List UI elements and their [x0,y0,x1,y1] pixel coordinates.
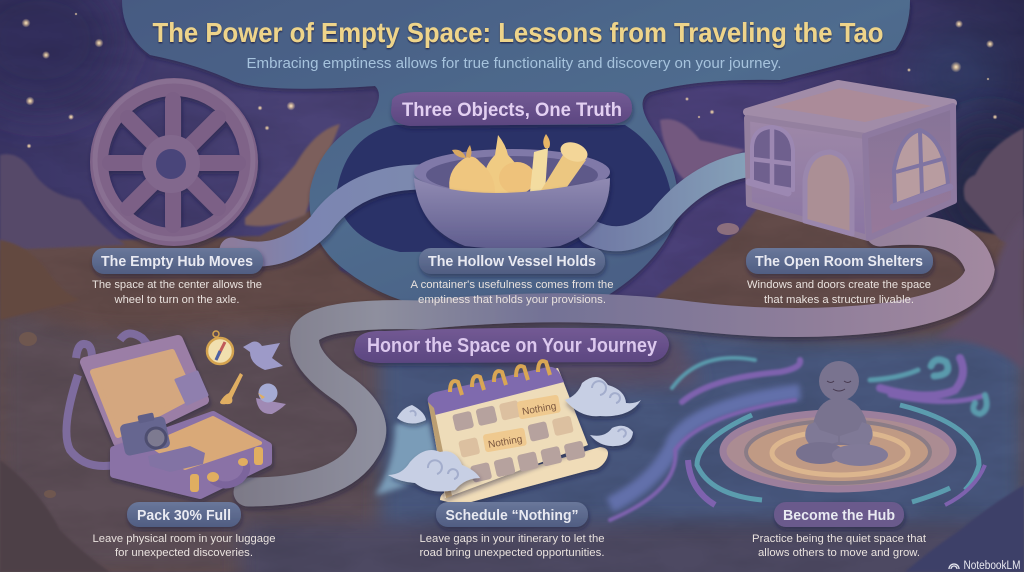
icon: calendar grid cells [452,388,586,484]
label: Pack 30% Full: Pack 30% Full [137,508,231,524]
text block: schedule description [420,533,604,559]
icon: suitcase strap and handles [66,333,148,466]
icon: Nothing note, lower [483,428,527,453]
subtitle: Embracing emptiness allows for true functionality and discovery on your journey. [246,55,782,72]
text block: hub description: The space at the center allows the [92,279,262,291]
icon: clasps and handle [190,447,263,492]
icon: wind swirls [610,358,987,520]
icon: compass [207,331,233,364]
river: blue stream below the schedule clouds [375,418,440,495]
title: The Power of Empty Space: Lessons from Traveling the Tao [152,17,884,48]
icon: key [220,373,243,404]
label: Become the Hub: Become the Hub [783,508,895,524]
icon: calendar with Nothing days [428,361,608,505]
label: The Open Room Shelters: The Open Room Shelters [755,254,923,270]
icon: pears, apple, candle and scroll [449,134,590,195]
rocks: left, right and corners [0,119,1024,572]
text block: hub description: wheel to turn on the axle. [113,294,240,306]
icon: wagon wheel [95,81,253,239]
label: Pack 30% Full [127,502,241,527]
text block: pack description: for unexpected discoveries. [115,547,253,559]
text block: room description: Windows and doors create the space [747,279,931,291]
panel heading: Honor the Space on Your Journey: Honor the Space on Your Journey [367,335,658,357]
icon: ripple rings around the figure [688,405,985,505]
icon: meditating figure [796,361,888,466]
icon: open suitcase [66,333,268,495]
icon: open room house [747,84,954,238]
text block: schedule description: Leave gaps in your itinerary to let the [420,533,604,545]
text block: schedule description: road bring unexpected opportunities. [420,547,604,559]
label: The Empty Hub Moves [92,248,263,274]
icon: house right window [893,130,950,207]
icon: clouds around the calendar [388,377,641,491]
text block: hub practice description: allows others to move and grow. [758,547,920,559]
river: upper ribbons connecting wheel, vessel and room [232,165,980,492]
text block: hub practice description [752,533,926,559]
text block: room description [747,279,931,306]
icon: camera [119,412,171,456]
text block: vessel description [410,279,614,306]
icon: books [148,446,205,472]
icon: calendar rings [450,361,550,395]
icon: flying bird [243,342,283,370]
text block: vessel description: emptiness that holds your provisions. [418,294,606,306]
label: The Empty Hub Moves: The Empty Hub Moves [101,254,253,270]
text block: room description: that makes a structure livable. [764,294,914,306]
background: night sky [0,0,1024,320]
label: The Open Room Shelters [746,248,933,274]
panel heading: Honor the Space on Your Journey [354,328,669,363]
text block: hub description [92,279,262,306]
title panel: blue clay backdrop with ring around the vessel [122,0,910,310]
text block: pack description: Leave physical room in your luggage [92,533,276,545]
panel heading: Three Objects, One Truth: Three Objects, One Truth [402,100,622,121]
label: Schedule "Nothing": Schedule “Nothing” [446,508,578,524]
label: The Hollow Vessel Holds: The Hollow Vessel Holds [428,254,596,270]
icon: small bird [256,384,286,414]
icon: Nothing note, upper: Nothing [521,401,557,418]
river: blue-violet stream into the ripples [610,392,800,505]
label: Become the Hub [774,502,904,527]
icon: Nothing note, lower: Nothing [487,434,523,451]
stars [22,12,998,148]
text block: vessel description: A container's usefulness comes from the [410,279,614,291]
icon: house left window [749,127,793,193]
icon: Nothing note, upper [517,395,561,420]
text block: pack description [92,533,276,559]
text block: hub practice description: Practice being the quiet space that [752,533,926,545]
panel heading: Three Objects, One Truth [391,92,632,126]
label: Schedule "Nothing" [436,502,588,527]
icon: house arched doorway [805,152,852,234]
label: The Hollow Vessel Holds [419,248,605,274]
icon: hollow vessel with provisions [414,134,610,249]
